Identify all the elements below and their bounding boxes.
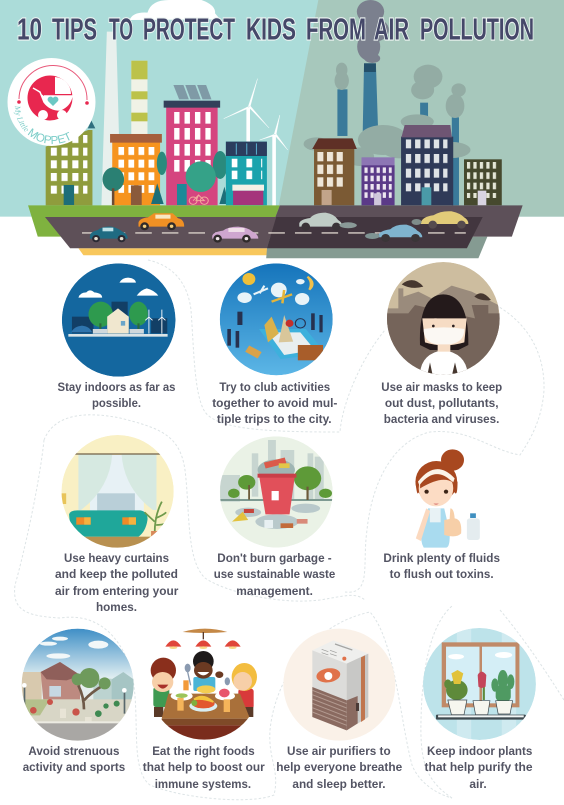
title: AIR bbox=[374, 12, 409, 46]
tip 3: air masks bbox=[381, 262, 502, 426]
tip 5 text: management. bbox=[236, 584, 313, 598]
tip 1 text: possible. bbox=[92, 396, 141, 410]
title bbox=[17, 12, 534, 46]
icon: garbage bin bbox=[220, 436, 333, 548]
tip 4 text bbox=[55, 551, 179, 614]
header: city illustration bbox=[0, 0, 564, 258]
tip 10 text: air. bbox=[469, 777, 487, 791]
tip 9 text: help everyone breathe bbox=[276, 760, 403, 774]
tip 4 text: air from entering your bbox=[55, 584, 179, 598]
icon: air purifier bbox=[283, 629, 395, 741]
title: FROM bbox=[306, 12, 366, 46]
tip 7 text bbox=[23, 744, 126, 774]
tip 2 text bbox=[212, 380, 337, 426]
grey smoke bbox=[304, 63, 470, 166]
tip 10: indoor plants bbox=[423, 628, 536, 791]
tip 5 text: Don't burn garbage - bbox=[217, 551, 332, 565]
tip 9 text: and sleep better. bbox=[292, 777, 386, 791]
icon: window with plants bbox=[423, 628, 536, 740]
icon: travel scene bbox=[220, 263, 333, 375]
tip 8 text: Eat the right foods bbox=[152, 744, 255, 758]
tip 4 text: Use heavy curtains bbox=[64, 551, 169, 565]
icon: house with turbines bbox=[62, 263, 176, 377]
polluted sky panel bbox=[279, 0, 564, 217]
tip 7 text: activity and sports bbox=[23, 760, 126, 774]
purple building bbox=[361, 157, 395, 205]
tip 6: drink fluids bbox=[383, 449, 500, 581]
tip 5 text: use sustainable waste bbox=[214, 567, 336, 581]
navy building bbox=[401, 125, 453, 205]
road: polluted bbox=[267, 217, 483, 248]
ground: yellow strip bbox=[78, 248, 268, 255]
teal building bbox=[226, 142, 267, 205]
dashed connector paths bbox=[15, 260, 564, 800]
tip 6 text bbox=[383, 551, 500, 581]
tip 1 text bbox=[58, 380, 176, 410]
wind turbines bbox=[224, 79, 288, 206]
road markings bbox=[82, 231, 466, 235]
solar panels bbox=[173, 85, 212, 99]
ground: green platform bbox=[28, 205, 280, 237]
car: light blue with exhaust bbox=[365, 225, 422, 242]
tip 3 text: Use air masks to keep bbox=[381, 380, 502, 394]
dark olive building bbox=[464, 159, 502, 205]
tip 6 text: to flush out toxins. bbox=[390, 567, 494, 581]
logo: My Little Moppet bbox=[8, 58, 96, 146]
tip 8 text: immune systems. bbox=[155, 777, 251, 791]
tip 5 text bbox=[214, 551, 336, 598]
car: yellow with exhaust bbox=[411, 211, 468, 229]
title: TO bbox=[109, 12, 133, 46]
icon: kids eating at table bbox=[151, 629, 257, 740]
dark smoke bbox=[357, 0, 389, 63]
tip 2 text: Try to club activities bbox=[219, 380, 331, 394]
icon: girl drinking water bbox=[415, 449, 480, 548]
tip 10 text bbox=[424, 744, 533, 791]
tip 2 text: tiple trips to the city. bbox=[217, 412, 332, 426]
car: orange bbox=[138, 213, 184, 230]
tip 2 text: together to avoid mul- bbox=[212, 396, 337, 410]
stroller icon bbox=[33, 77, 72, 120]
tip 8: right foods bbox=[143, 629, 265, 791]
tip 10 text: that help purify the bbox=[424, 760, 533, 774]
ground: dark platform bbox=[268, 205, 523, 237]
brown building bbox=[312, 138, 357, 205]
road: clean bbox=[45, 217, 276, 248]
tip 9 text: Use air purifiers to bbox=[287, 744, 391, 758]
tip 9: air purifiers bbox=[276, 629, 403, 791]
tip 4: heavy curtains bbox=[55, 435, 179, 614]
tip 1 text: Stay indoors as far as bbox=[58, 380, 176, 394]
tip 5: don't burn garbage bbox=[214, 436, 336, 598]
tip 10 text: Keep indoor plants bbox=[427, 744, 533, 758]
trees bbox=[103, 151, 229, 205]
tip 7 text: Avoid strenuous bbox=[28, 744, 120, 758]
car: lilac bbox=[212, 227, 258, 243]
logo: My Little Moppet: My Little MOPPET bbox=[14, 106, 70, 144]
tip 3 text: out dust, pollutants, bbox=[385, 396, 499, 410]
tip 7: avoid strenuous activity bbox=[22, 629, 135, 774]
pink building bbox=[164, 101, 220, 205]
title: TIPS bbox=[52, 12, 97, 46]
factory chimneys bbox=[337, 63, 459, 205]
tip 3 text: bacteria and viruses. bbox=[384, 412, 499, 426]
tip 6 text: Drink plenty of fluids bbox=[383, 551, 500, 565]
white chimney bbox=[101, 32, 121, 205]
orange building bbox=[110, 134, 162, 205]
clean sky panel bbox=[0, 0, 564, 217]
tip 8 text: that help to boost our bbox=[143, 760, 265, 774]
tip 3 text bbox=[381, 380, 502, 426]
title: KIDS bbox=[246, 12, 296, 46]
tip 4 text: homes. bbox=[96, 600, 137, 614]
striped chimney bbox=[131, 61, 147, 134]
tip 1: stay indoors bbox=[58, 263, 176, 410]
olive building bbox=[46, 121, 95, 205]
cloud bbox=[129, 0, 220, 20]
car: blue bbox=[90, 227, 128, 242]
tip 8 text bbox=[143, 744, 265, 791]
title: PROTECT bbox=[143, 12, 235, 46]
tip 2: club activities bbox=[212, 263, 337, 426]
icon: window with curtains and sofa bbox=[61, 435, 176, 550]
icon: neighbourhood with children bbox=[22, 629, 135, 741]
bicycle bbox=[189, 195, 208, 204]
car: grey with exhaust bbox=[299, 213, 357, 231]
tip 9 text bbox=[276, 744, 403, 791]
tip 4 text: and keep the polluted bbox=[55, 567, 178, 581]
title: 10 bbox=[17, 12, 42, 46]
icon: girl with mask bbox=[385, 262, 502, 382]
ground: grey strip bbox=[266, 237, 487, 258]
